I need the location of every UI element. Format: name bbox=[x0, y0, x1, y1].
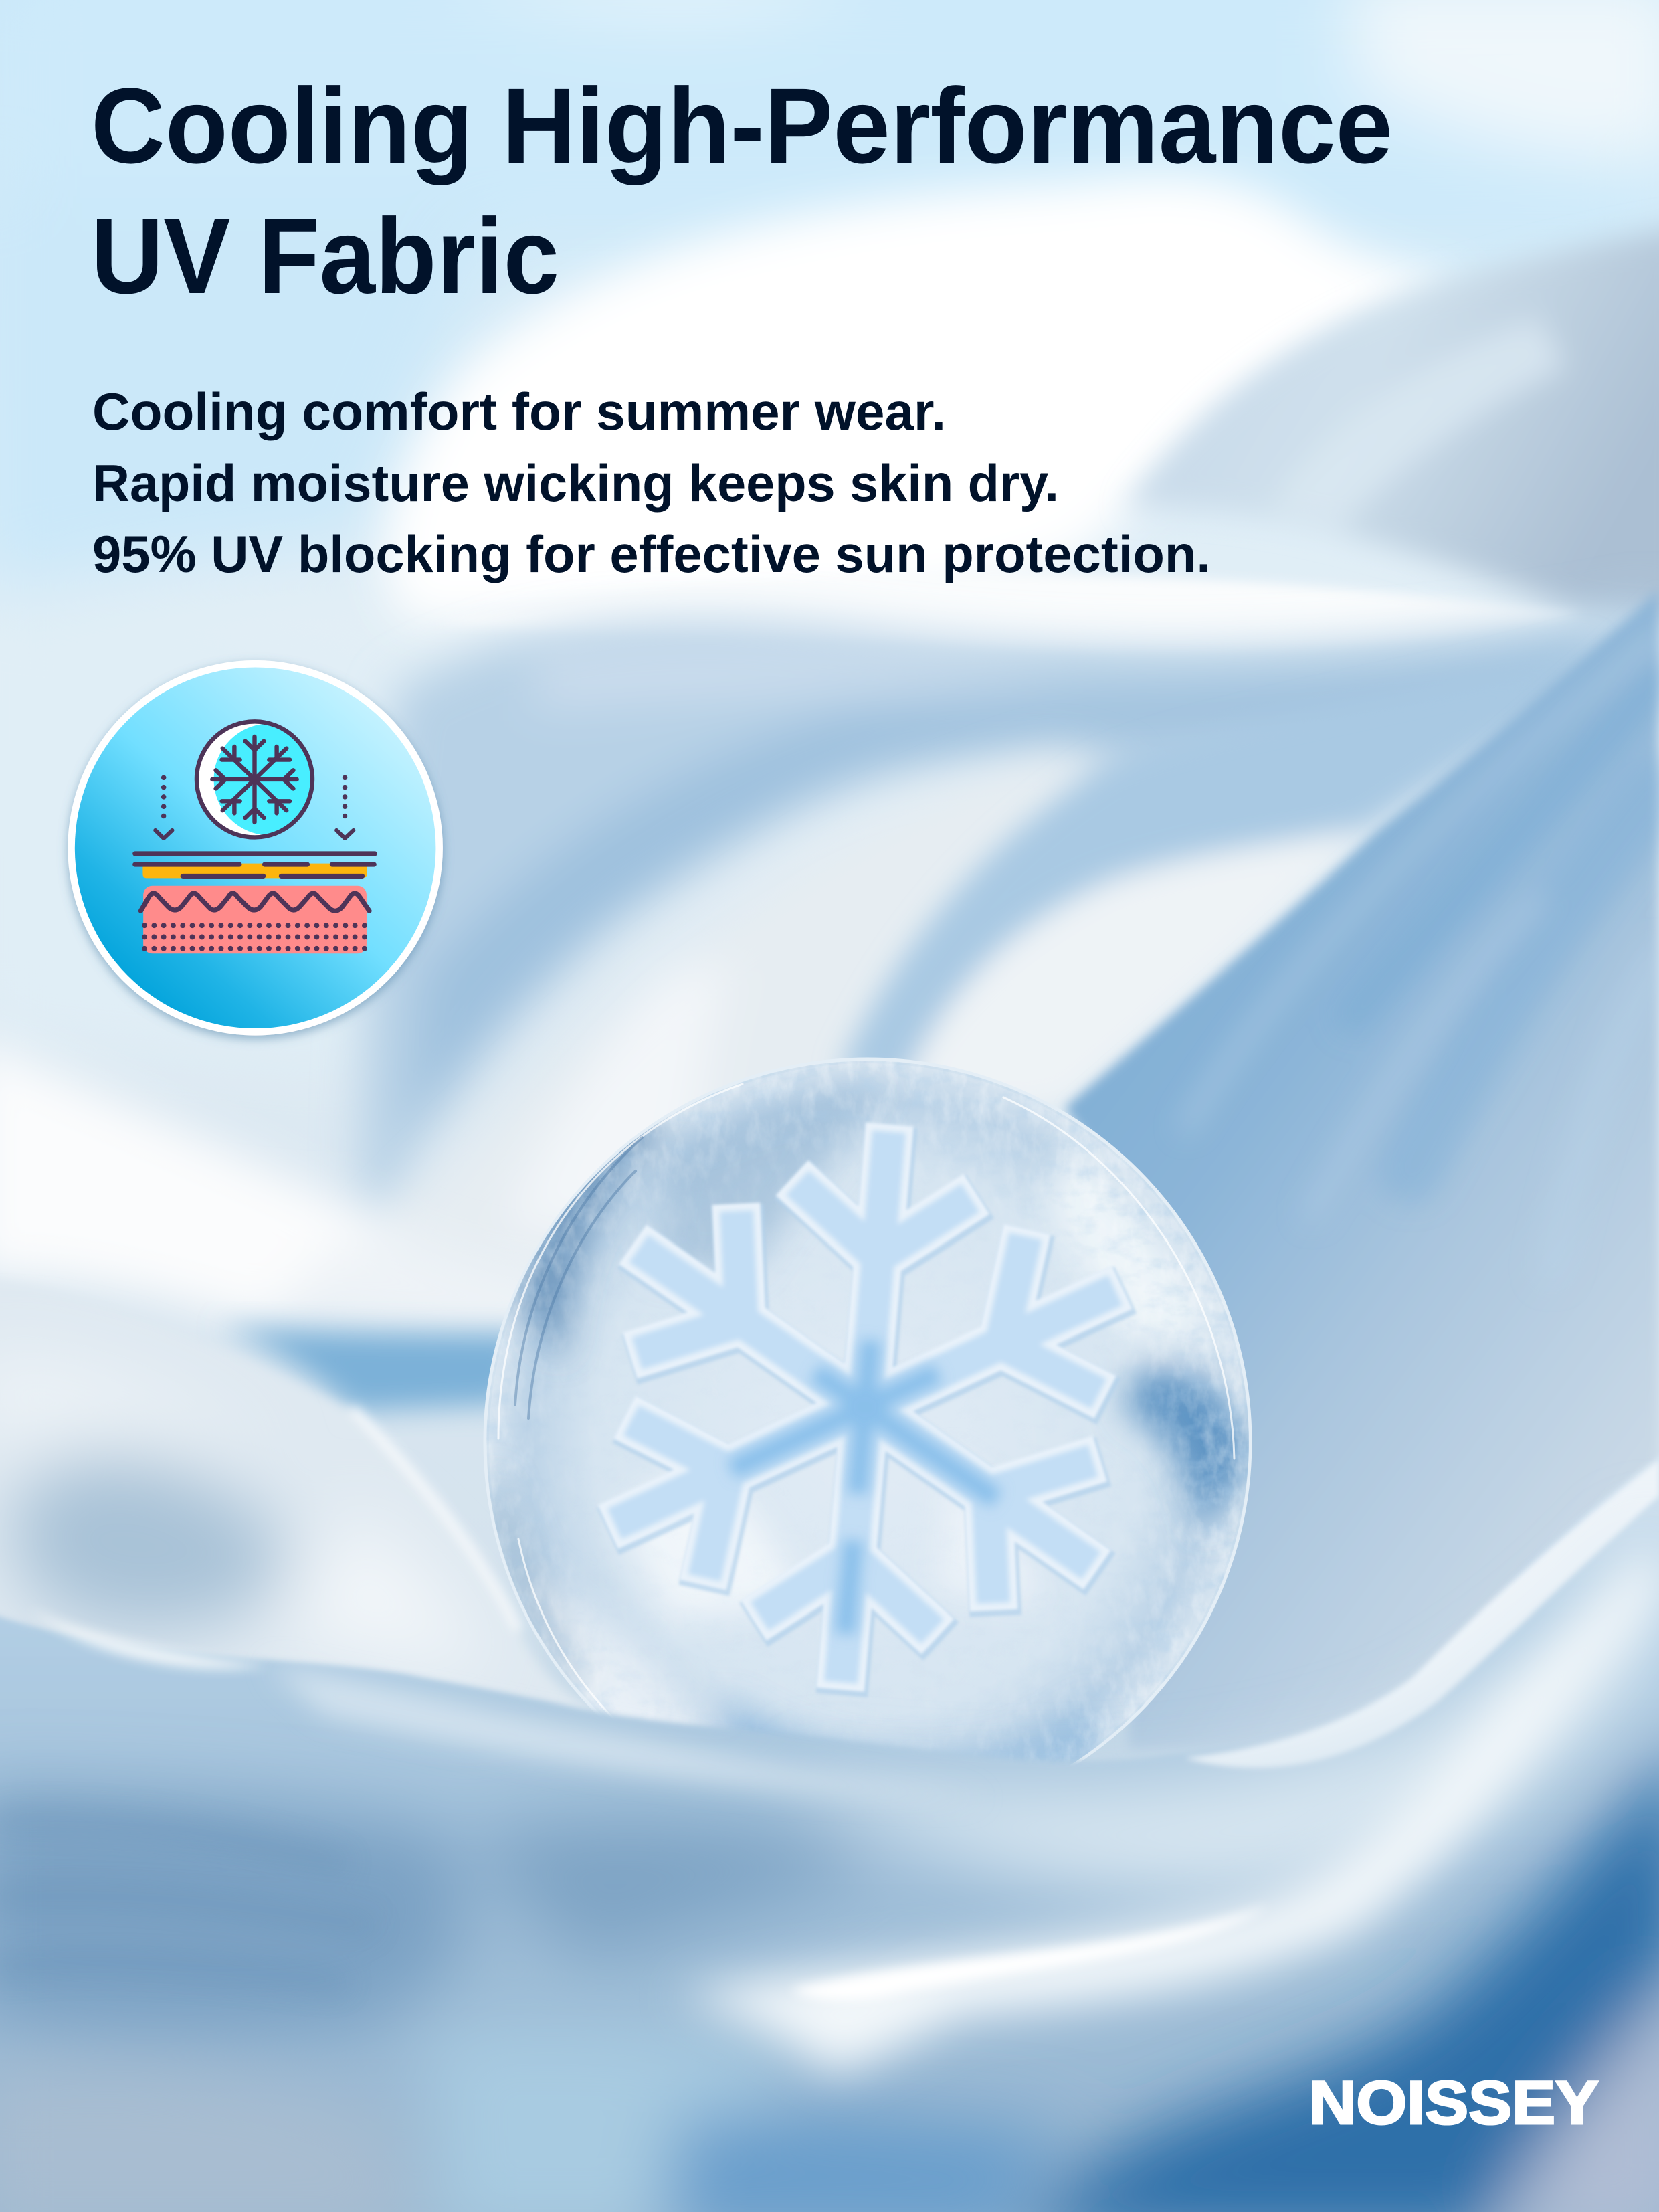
brand logo: NOISSEY bbox=[1309, 2069, 1599, 2137]
title bbox=[91, 66, 1393, 316]
description text: 95% UV blocking for effective sun protection. bbox=[92, 525, 1211, 583]
arrow: right dotted bbox=[336, 777, 353, 838]
description text: Rapid moisture wicking keeps skin dry. bbox=[92, 454, 1059, 513]
description text bbox=[92, 382, 1211, 583]
arrow: left dotted bbox=[155, 777, 172, 838]
skin layer bbox=[140, 886, 369, 953]
icon: snowflake disc bbox=[197, 721, 326, 837]
snowflake arms bbox=[581, 1125, 1150, 1692]
description text: Cooling comfort for summer wear. bbox=[92, 382, 946, 441]
fabric layers bbox=[135, 854, 375, 878]
icon: cooling fabric layers badge bbox=[68, 660, 443, 1036]
foreground fabric sweep bbox=[0, 1447, 1659, 2212]
title: UV Fabric bbox=[91, 196, 559, 316]
title: Cooling High-Performance bbox=[91, 66, 1393, 185]
ice sphere with snowflake bbox=[485, 1059, 1251, 1827]
